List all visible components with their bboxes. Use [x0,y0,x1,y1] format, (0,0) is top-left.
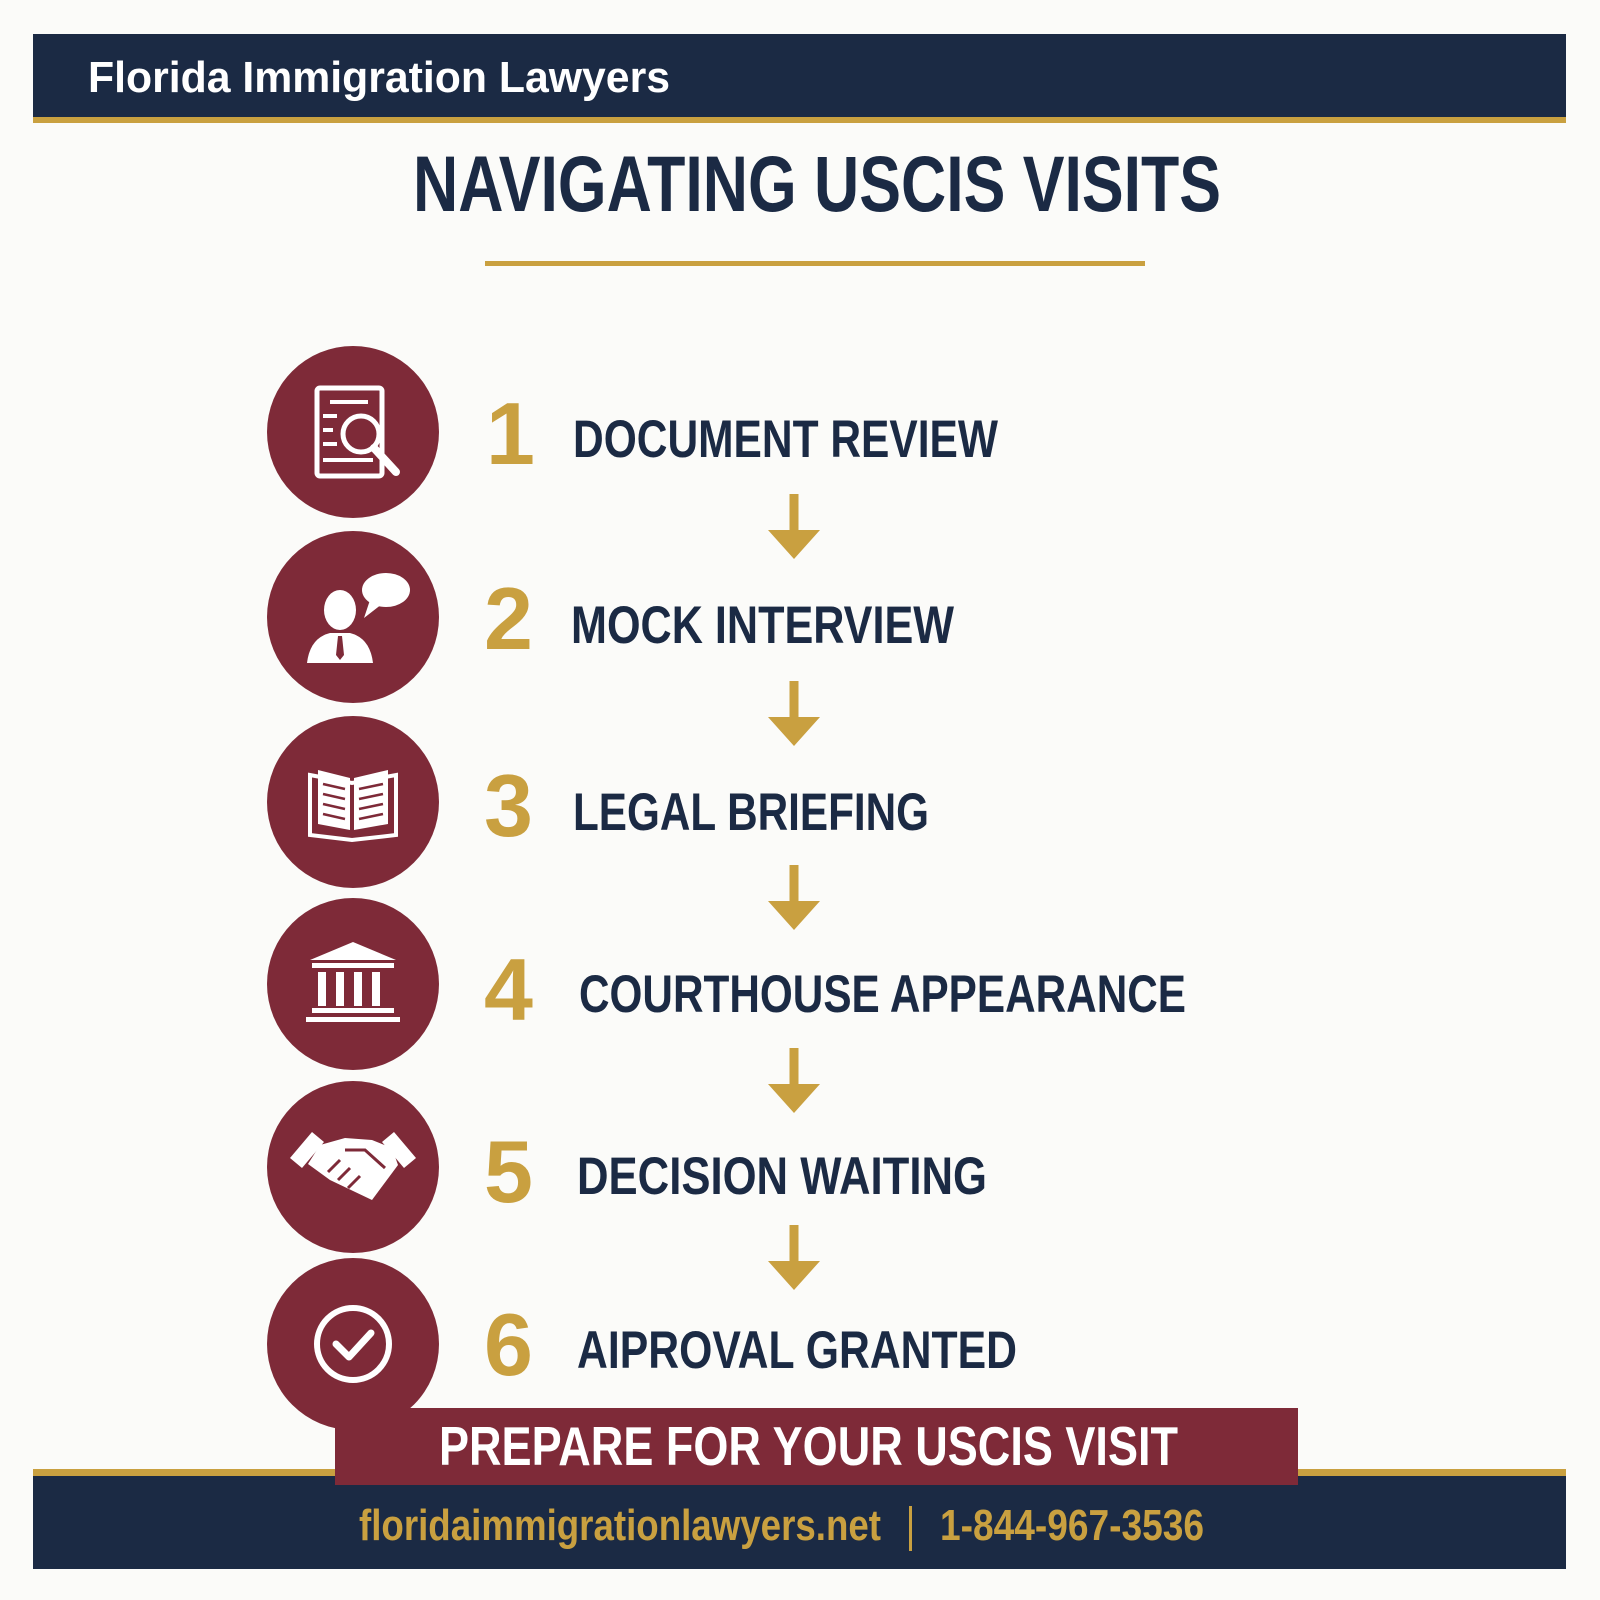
icon: document review [267,346,439,518]
icon: courthouse [267,898,439,1070]
label 1: DOCUMENT REVIEW [573,410,998,469]
number 6: 6 [484,1295,533,1394]
icon: mock interview [267,531,439,703]
label 5: DECISION WAITING [577,1147,987,1206]
step 3 [267,716,929,888]
label 4: COURTHOUSE APPEARANCE [579,965,1186,1024]
step 4 [267,898,1186,1070]
label 6: AIPROVAL GRANTED [577,1321,1017,1380]
arrow 5 [768,1225,820,1290]
number 2: 2 [484,569,533,668]
header bar [33,34,1566,123]
call to action banner: PREPARE FOR YOUR USCIS VISIT [439,1415,1178,1477]
arrow 2 [768,681,820,746]
footer phone: 1-844-967-3536 [940,1501,1204,1550]
arrow 3 [768,865,820,930]
title: NAVIGATING USCIS VISITS [413,139,1221,228]
number 5: 5 [484,1122,533,1221]
icon: approval check [267,1258,439,1430]
number 4: 4 [484,940,533,1039]
step 1 [267,346,998,518]
header text: Florida Immigration Lawyers [88,53,670,102]
label 3: LEGAL BRIEFING [573,783,929,842]
arrow 1 [768,494,820,559]
step 6 [267,1258,1017,1430]
footer website: floridaimmigrationlawyers.net [359,1501,881,1550]
label 2: MOCK INTERVIEW [571,596,954,655]
icon: legal briefing book [267,716,439,888]
step 5 [267,1081,987,1253]
number 1: 1 [486,384,535,483]
bottom footer bar [33,1469,1566,1569]
step 2 [267,531,954,703]
title underline [485,261,1145,266]
icon: handshake [267,1081,439,1253]
arrow 4 [768,1048,820,1113]
number 3: 3 [484,756,533,855]
call to action banner [335,1408,1298,1485]
